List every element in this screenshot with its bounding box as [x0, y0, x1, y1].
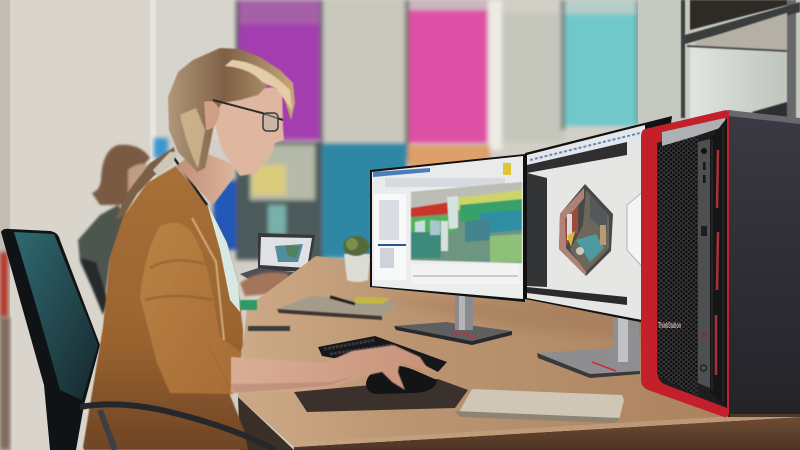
right monitor stand — [537, 318, 640, 378]
mouse — [366, 366, 437, 394]
left monitor — [370, 154, 525, 302]
chair armrest — [80, 404, 275, 450]
green object on desk — [240, 300, 257, 310]
arm and hand on mouse — [231, 345, 430, 393]
right monitor — [525, 116, 672, 323]
console text — [411, 264, 519, 284]
CFD simulation view — [411, 182, 522, 263]
isometric room model — [559, 184, 613, 276]
white top and lanyard — [174, 158, 240, 312]
cardigan sleeve — [140, 218, 242, 394]
software ribbon — [373, 158, 522, 192]
workstation tower — [641, 110, 800, 417]
workstation tower: ThinkStation — [658, 321, 681, 330]
glasses — [213, 100, 283, 131]
left monitor stand — [394, 296, 512, 345]
ponytail — [115, 147, 176, 220]
front grille — [657, 120, 727, 408]
potted plant — [343, 236, 370, 282]
file tree panel — [374, 194, 406, 280]
desk — [238, 256, 800, 450]
keyboard — [318, 336, 447, 372]
office chair — [1, 229, 100, 450]
paper folder on desk — [455, 389, 624, 423]
mouse pad — [294, 379, 468, 412]
woman at desk — [1, 48, 437, 450]
chair post — [100, 410, 115, 450]
sidebar — [527, 173, 547, 287]
wireframe model — [627, 190, 645, 270]
red front frame — [641, 110, 729, 417]
notebook and pen on desk — [248, 296, 399, 331]
face — [215, 87, 284, 176]
hair — [115, 48, 295, 220]
red side vents — [710, 118, 727, 408]
background colleague with laptop — [78, 145, 315, 315]
laptop — [240, 233, 315, 296]
toolbar — [527, 127, 645, 173]
neck — [176, 150, 235, 205]
cardigan body — [83, 166, 248, 450]
ports strip — [698, 139, 710, 388]
side panel — [728, 110, 800, 417]
ear — [204, 101, 220, 130]
bottom bar — [527, 287, 627, 305]
